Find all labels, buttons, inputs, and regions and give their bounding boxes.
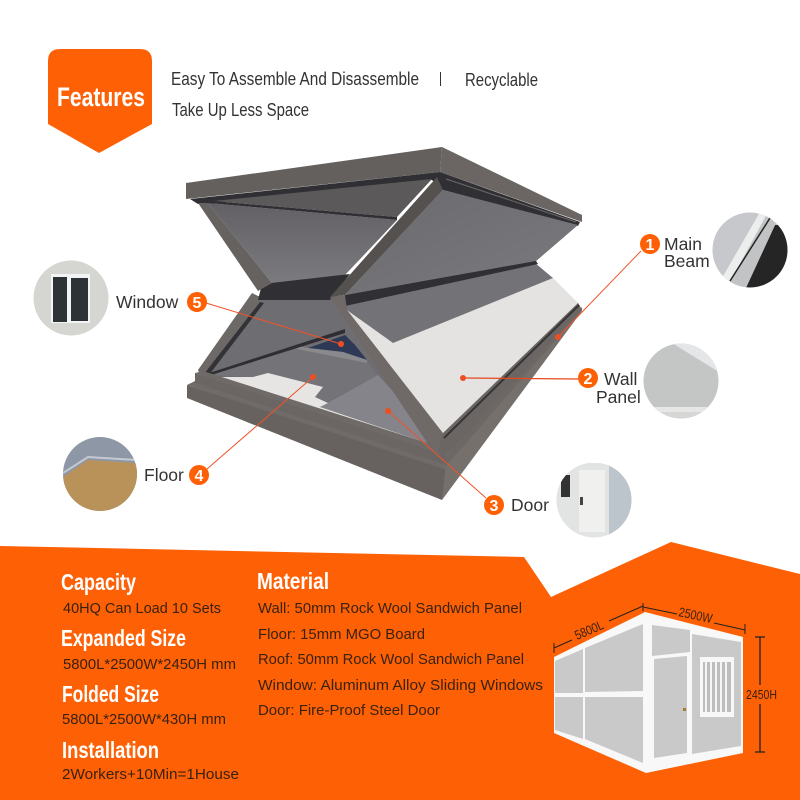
dimension 5800L: 5800L bbox=[572, 617, 606, 643]
callout 5: window: Window bbox=[116, 292, 179, 312]
callout 4: floor: Floor bbox=[144, 465, 184, 485]
lower back wall bbox=[210, 300, 345, 375]
container house diagram bbox=[554, 603, 777, 773]
upper back panel bbox=[214, 179, 432, 217]
dark window in the back bbox=[308, 335, 367, 360]
spec: capacity: Capacity bbox=[61, 569, 136, 595]
callout 2: wall panel: 2 bbox=[584, 371, 593, 388]
right rail bbox=[438, 303, 581, 455]
photo: door bbox=[556, 463, 632, 539]
feature list bbox=[171, 69, 538, 120]
feature list: Recyclable bbox=[465, 70, 538, 90]
upper right panel bbox=[345, 190, 578, 295]
door handle bbox=[683, 708, 686, 711]
roof bbox=[186, 147, 582, 222]
spec: material: Roof: 50mm Rock Wool Sandwich Panel bbox=[258, 651, 524, 668]
callout 4: floor: 4 bbox=[195, 468, 204, 485]
callout 4: floor bbox=[144, 465, 209, 485]
floor white strip bbox=[215, 373, 430, 447]
spec: material bbox=[257, 568, 543, 719]
callout 1: main beam: 1 bbox=[646, 237, 655, 254]
spec: folded size: Folded Size bbox=[62, 681, 159, 707]
spec: installation: Installation bbox=[62, 737, 159, 763]
spec: material: Wall: 50mm Rock Wool Sandwich Panel bbox=[258, 600, 522, 617]
dimension 2500W bbox=[643, 603, 745, 634]
callout 2: wall panel: Panel bbox=[596, 387, 641, 407]
callout 1: main beam: Beam bbox=[664, 251, 710, 271]
dimension 2450H bbox=[746, 637, 777, 752]
callout leaders bbox=[206, 251, 641, 498]
orange bottom band bbox=[0, 542, 800, 800]
spec: expanded size: 5800L*2500W*2450H mm bbox=[63, 656, 236, 673]
feature list: Easy To Assemble And Disassemble bbox=[171, 69, 419, 89]
spec: folded size: 5800L*2500W*430H mm bbox=[62, 711, 226, 728]
spec: material: Window: Aluminum Alloy Sliding Windows bbox=[258, 677, 543, 694]
dimension 2500W: 2500W bbox=[677, 604, 714, 626]
door panel bbox=[320, 375, 430, 447]
spec: material: Material bbox=[257, 568, 329, 594]
photo: floor bbox=[63, 437, 137, 511]
callout 1: main beam bbox=[640, 234, 710, 271]
feature list: Take Up Less Space bbox=[172, 100, 309, 120]
mid dark bands bbox=[345, 261, 538, 306]
spec: capacity: 40HQ Can Load 10 Sets bbox=[63, 600, 221, 617]
main cross strut upper bbox=[330, 177, 443, 297]
lower right white panel bbox=[347, 278, 578, 433]
folding house illustration bbox=[186, 147, 582, 500]
spec: capacity bbox=[61, 569, 221, 617]
callout 3: door bbox=[484, 495, 549, 515]
callout 5: window: 5 bbox=[193, 295, 202, 312]
callout 3: door: Door bbox=[511, 495, 549, 515]
features badge: Features bbox=[57, 82, 145, 112]
spec: material: Door: Fire-Proof Steel Door bbox=[258, 702, 440, 719]
features badge bbox=[48, 49, 152, 153]
photo: window bbox=[33, 260, 109, 336]
interior backing bbox=[198, 296, 447, 455]
callout 3: door: 3 bbox=[490, 498, 499, 515]
callout 5: window bbox=[116, 292, 207, 312]
floor frame bbox=[195, 371, 440, 454]
base block bbox=[187, 303, 582, 500]
main cross strut lower bbox=[330, 295, 447, 455]
spec: installation: 2Workers+10Min=1House bbox=[62, 766, 239, 783]
window sill strip bbox=[297, 346, 367, 363]
dark diagonal brace bbox=[203, 329, 345, 376]
lower right grey panel bbox=[345, 263, 553, 343]
spec: expanded size: Expanded Size bbox=[61, 625, 186, 651]
barred window bbox=[700, 657, 734, 717]
spec: expanded size bbox=[61, 625, 236, 673]
upper left panel bbox=[208, 203, 397, 283]
spec: installation bbox=[62, 737, 239, 783]
interior floor grey bbox=[210, 348, 378, 402]
under-roof dark channel bbox=[190, 172, 580, 226]
dimension 5800L bbox=[554, 606, 643, 653]
upper left strut bbox=[198, 203, 272, 291]
spec: material: Floor: 15mm MGO Board bbox=[258, 626, 425, 643]
photo: main beam bbox=[712, 212, 790, 290]
spec: folded size bbox=[62, 681, 226, 728]
callout 1: main beam: Main bbox=[664, 234, 702, 254]
dimension 2450H: 2450H bbox=[746, 687, 777, 702]
photo: wall panel bbox=[643, 343, 719, 420]
lower left strut bbox=[198, 293, 262, 373]
callout 2: wall panel: Wall bbox=[604, 369, 637, 389]
callout 2: wall panel bbox=[578, 368, 641, 407]
